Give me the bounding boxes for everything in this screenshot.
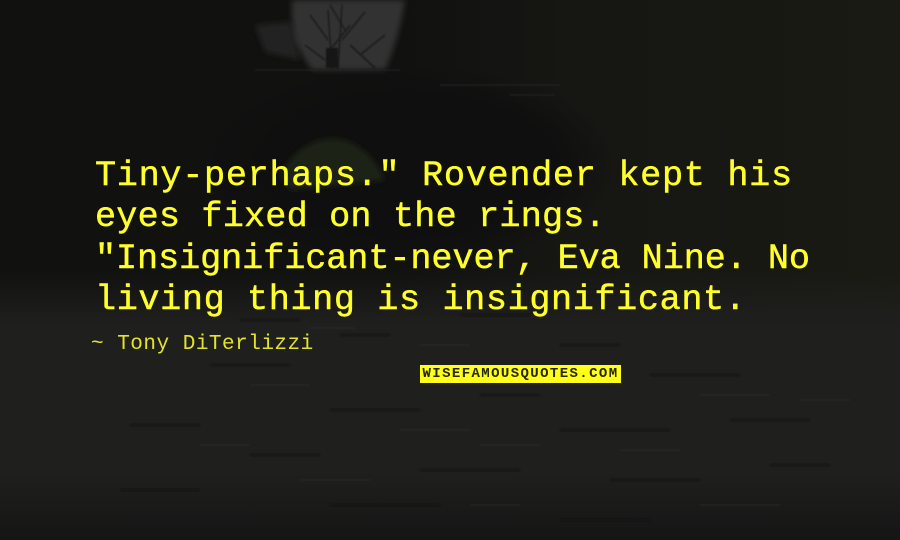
bare tree [305, 5, 385, 70]
quote text [95, 156, 810, 320]
river [0, 270, 900, 540]
bridge arch opening [280, 139, 385, 190]
author attribution: ~ Tony DiTerlizzi [91, 333, 314, 356]
quote line 3: "Insignificant-never, Eva Nine. No [95, 239, 810, 279]
water ripples [120, 315, 830, 520]
quote line 1: Tiny-perhaps." Rovender kept his [95, 156, 793, 196]
sky [292, 0, 405, 70]
stone bridge [200, 65, 620, 265]
quote line 4: living thing is insignificant. [95, 280, 746, 320]
watermark badge: WISEFAMOUSQUOTES.COM [422, 366, 619, 382]
right trees [400, 0, 900, 320]
quote line 2: eyes fixed on the rings. [95, 197, 606, 237]
